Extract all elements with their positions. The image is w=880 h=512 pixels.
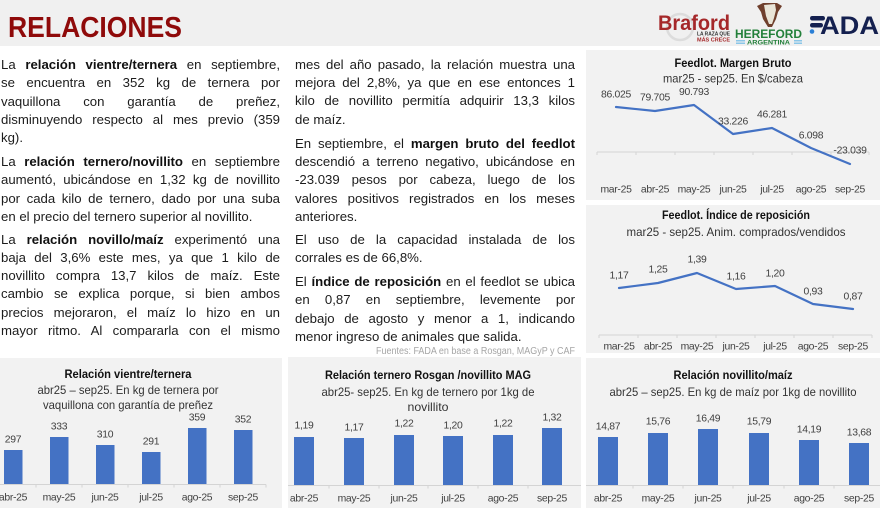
month labels: sep-25 (835, 184, 865, 196)
bar chart: ternero/novillo (294, 428, 562, 485)
data labels: 1,39 (687, 254, 707, 266)
text: La relación novillo/maíz experimentó una (1, 232, 280, 247)
panel: Relacion ternero/novillo (288, 357, 581, 508)
header band (0, 0, 880, 46)
data labels: 16,49 (696, 414, 721, 424)
subtitle: vientre/ternera: vaquillona con garantía de preñez (43, 398, 213, 412)
data labels: 15,79 (747, 416, 772, 428)
text: por cada kilo de ternero, dado por una suba (1, 191, 280, 206)
data labels: 352 (235, 414, 252, 426)
data labels: 297 (5, 434, 22, 446)
logo: Braford: MÁS CRECE (697, 36, 730, 44)
data labels: 333 (51, 422, 68, 432)
text: kilo de novillito permitía adquirir 13,3 kilos (295, 93, 575, 108)
axis (0, 484, 266, 488)
line chart: indice de reposicion (619, 273, 853, 309)
panel: Relacion vientre/ternera (0, 358, 282, 508)
data labels: 1,22 (394, 418, 414, 430)
source note: Fuentes: FADA en base a Rosgan, MAGyP y CAF (376, 346, 575, 357)
data labels: 1,32 (542, 412, 562, 424)
text: anteriores. (295, 209, 357, 224)
month labels: abr-25 (641, 184, 670, 196)
heading: ternero/novillo: Relación ternero Rosgan /novillito MAG (325, 370, 531, 382)
heading: novillito/maiz: Relación novillito/maíz (674, 370, 793, 382)
data labels: 79.705 (640, 92, 671, 104)
data labels: 291 (143, 436, 160, 448)
month labels: abr-25 (644, 342, 673, 352)
month labels: sep-25 (228, 492, 258, 504)
month labels: sep-25 (844, 494, 874, 504)
month labels: ago-25 (798, 342, 829, 352)
month labels: jul-25 (762, 342, 787, 352)
text: El uso de la capacidad instalada de los (295, 232, 575, 247)
data labels: 14,19 (797, 424, 822, 436)
logo: Braford: Braford (658, 12, 730, 35)
line chart: margen bruto (616, 105, 850, 164)
text: baja del 3,6% este mes, ya que 1 kilo de (1, 250, 280, 265)
data labels (596, 414, 872, 438)
month labels (0, 492, 258, 504)
month labels: mar-25 (600, 184, 632, 196)
axis (599, 335, 872, 338)
text: se encuentra en 352 kg de ternera por (1, 75, 280, 90)
text: valores positivos registrados en los meses (295, 191, 575, 206)
text: En septiembre, el margen bruto del feedlot (295, 136, 575, 151)
month labels: sep-25 (838, 342, 868, 352)
subtitle: vientre/ternera: abr25 – sep25. En kg de ternera por (38, 383, 219, 397)
text: El índice de reposición en el feedlot se ubica (295, 274, 575, 289)
subtitle: margen bruto: mar25 - sep25. En $/cabeza (663, 72, 803, 86)
text: cambio se explica porque, si bien ambos (1, 286, 280, 301)
month labels: jun-25 (90, 492, 119, 504)
data labels: 6.098 (799, 130, 824, 142)
subtitle: ternero/novillo: abr25- sep25. En kg de ternero por 1kg de (322, 385, 535, 399)
text: menor ingreso de animales que salida. (295, 329, 522, 344)
data labels (294, 412, 562, 434)
panel: Feedlot indice de reposicion (586, 205, 880, 353)
data labels: -23.039 (833, 146, 867, 156)
text: novillito compra 13,7 kilos de maíz. Este (1, 268, 280, 283)
subtitle: indice de reposicion: mar25 - sep25. Anim. comprados/vendidos (626, 225, 846, 239)
data labels: 1,17 (609, 270, 629, 282)
text: debajo de agosto y menor a 1, indicando (295, 311, 575, 326)
month labels: abr-25 (290, 494, 319, 504)
month labels: jun-25 (718, 184, 747, 196)
text: en 0,87 en septiembre, levemente por (295, 292, 575, 307)
month labels: ago-25 (794, 494, 825, 504)
text block: right column (295, 57, 575, 344)
month labels: ago-25 (796, 184, 827, 196)
text: mes del año pasado, la relación muestra una (295, 57, 575, 72)
heading: margen bruto: Feedlot. Margen Bruto (674, 58, 792, 70)
month labels (594, 494, 874, 504)
text: mejora del 2,8%, ya que en ese entonces 1 (295, 75, 575, 90)
text: La relación vientre/ternera en septiembre, (1, 57, 280, 72)
panel: Relacion novillito/maiz (586, 358, 880, 508)
text: corrales es de 66,8%. (295, 250, 423, 265)
data labels: 359 (189, 412, 206, 424)
subtitle: ternero/novillo: novillito (408, 400, 449, 414)
data labels: 1,22 (493, 418, 513, 430)
text: disminuyendo respecto al mes previo (359 (1, 112, 280, 127)
logo: Hereford Argentina (735, 3, 802, 46)
month labels: abr-25 (594, 494, 623, 504)
data labels: 1,19 (294, 420, 314, 432)
data labels: 1,20 (443, 420, 463, 432)
heading: vientre/ternera: Relación vientre/ternera (64, 369, 192, 381)
data labels: 15,76 (646, 416, 671, 428)
month labels: mar-25 (603, 342, 635, 352)
subtitle: vientre/ternera (38, 383, 219, 412)
data labels: 33.226 (718, 116, 749, 128)
bar chart: vientre/ternera (4, 428, 252, 484)
text block: left column (1, 57, 280, 338)
data labels: 1,25 (648, 264, 668, 276)
text: en el precio del ternero superior al novillito. (1, 209, 252, 224)
data labels (609, 254, 863, 302)
logo: FADA: ADA (820, 12, 879, 40)
month labels (600, 184, 865, 196)
axis (586, 486, 880, 488)
logo: Hereford Argentina: HEREFORD (735, 29, 802, 41)
data labels: 1,16 (726, 272, 746, 282)
data labels: 13,68 (847, 428, 872, 438)
month labels (603, 342, 868, 352)
data labels: 14,87 (596, 422, 621, 432)
logo: Braford: LA RAZA QUE (697, 32, 731, 38)
subtitle: novillito/maiz: abr25 – sep25. En kg de maíz por 1kg de novillito (610, 385, 857, 399)
text: vaquillona con garantía de preñez, (1, 94, 280, 109)
panel: Feedlot margen bruto (586, 50, 880, 200)
month labels: may-25 (681, 342, 714, 352)
data labels: 0,93 (803, 286, 823, 298)
text: de maíz. (295, 112, 346, 127)
month labels: jul-25 (138, 492, 163, 504)
subtitle: ternero/novillo (322, 385, 535, 414)
logo: Hereford Argentina: ARGENTINA (747, 40, 790, 46)
month labels: may-25 (678, 184, 711, 196)
axis (597, 152, 869, 155)
month labels: jul-25 (440, 494, 465, 504)
text: mayor ritmo. Al compararla con el mismo (1, 323, 280, 338)
month labels: may-25 (43, 492, 76, 504)
text: La relación ternero/novillito en septiembre (1, 154, 280, 169)
data labels: 0,87 (843, 292, 863, 302)
text: descendió a terreno negativo, ubicándose en (295, 154, 575, 169)
month labels: jun-25 (693, 494, 722, 504)
month labels (290, 494, 567, 504)
data labels: 90.793 (679, 87, 710, 98)
data labels: 46.281 (757, 110, 788, 120)
month labels: jul-25 (746, 494, 771, 504)
data labels (601, 87, 867, 156)
month labels: jul-25 (759, 184, 784, 196)
month labels: may-25 (338, 494, 371, 504)
data labels: 310 (97, 430, 114, 440)
bar chart: novillito/maiz (598, 429, 869, 485)
data labels: 86.025 (601, 90, 632, 100)
heading: indice de reposicion: Feedlot. Índice de reposición (662, 209, 810, 222)
data labels: 1,20 (765, 268, 785, 280)
text: precios mejoraron, el maíz lo hizo en un (1, 305, 280, 320)
month labels: ago-25 (182, 492, 213, 504)
text: -23.039 pesos por cabeza, luego de los (295, 172, 575, 187)
month labels: ago-25 (488, 494, 519, 504)
month labels: jun-25 (721, 342, 750, 352)
text: aumentó, ubicándose en 1,32 kg de novillito (1, 172, 280, 187)
axis (288, 486, 581, 488)
title: RELACIONES (8, 12, 182, 44)
month labels: sep-25 (537, 494, 567, 504)
text: kg). (1, 130, 23, 145)
data labels (5, 412, 252, 448)
month labels: may-25 (642, 494, 675, 504)
month labels: jun-25 (389, 494, 418, 504)
data labels: 1,17 (344, 422, 364, 434)
